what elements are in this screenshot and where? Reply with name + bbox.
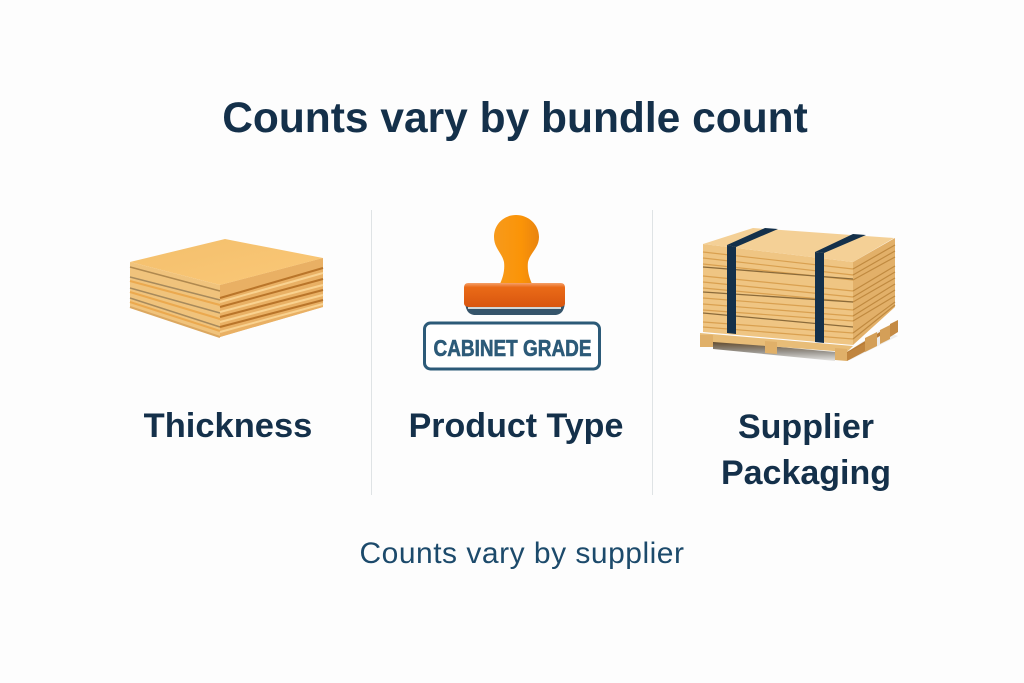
label: supplier packaging: Packaging xyxy=(721,454,891,492)
label: product type: Product Type xyxy=(409,407,623,445)
stamp base xyxy=(464,283,565,315)
label: thickness: Thickness xyxy=(144,407,312,445)
title: Counts vary by bundle count xyxy=(222,95,808,142)
footer note: Counts vary by supplier xyxy=(360,537,684,570)
label: supplier packaging xyxy=(721,408,891,492)
board stack xyxy=(703,228,895,345)
icon: strapped pallet of boards xyxy=(700,228,898,361)
label: supplier packaging: Supplier xyxy=(738,408,874,446)
stamp handle xyxy=(494,215,539,286)
icon: stack of boards xyxy=(130,239,324,338)
straps xyxy=(727,228,866,343)
icon: stamp xyxy=(423,215,601,370)
pallet xyxy=(700,320,898,361)
label: cabinet grade xyxy=(424,323,600,369)
